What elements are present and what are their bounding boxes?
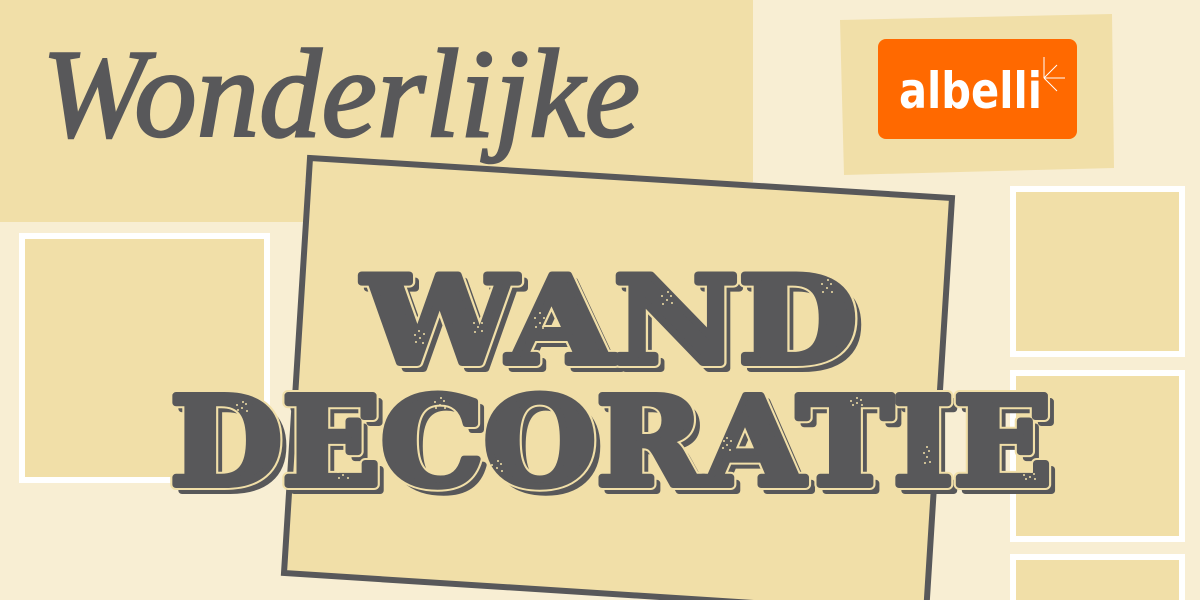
panel: right picture frame top <box>1013 189 1182 354</box>
WAND shadow: WAND <box>367 256 863 398</box>
DECORATIE shadow: DECORATIE <box>176 376 1058 520</box>
heading: WAND <box>361 250 863 398</box>
panel: right picture frame bottom <box>1013 557 1182 600</box>
panel: left picture frame <box>22 236 267 480</box>
heading: DECORATIE <box>170 370 1058 520</box>
logo: albelli <box>878 39 1077 139</box>
logo background <box>878 39 1077 139</box>
panel: central tilted board <box>284 158 952 600</box>
heading: Wonderlijke: Wonderlijke <box>42 25 640 164</box>
panel: logo backing <box>840 14 1114 175</box>
logo sparkle <box>1044 57 1065 91</box>
DECORATIE gap: DECORATIE <box>170 370 1052 514</box>
WAND face: WAND <box>361 250 857 392</box>
panel: top left banner <box>0 0 753 222</box>
DECORATIE face: DECORATIE <box>170 370 1052 514</box>
panel: right picture frame middle <box>1013 373 1182 539</box>
WAND gap: WAND <box>361 250 857 392</box>
logo wordmark: albelli <box>899 62 1042 120</box>
